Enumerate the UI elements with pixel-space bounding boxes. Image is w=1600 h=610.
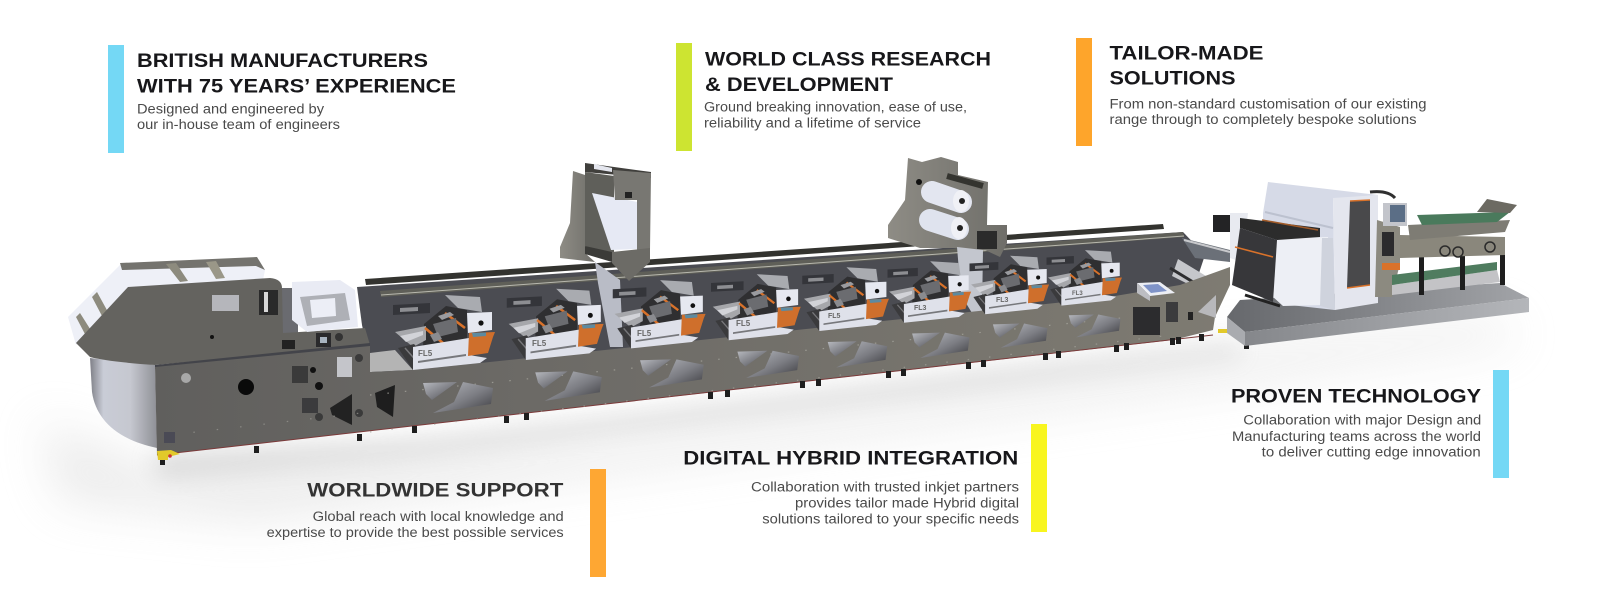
body text: to deliver cutting edge innovation	[1262, 445, 1481, 460]
heading: WORLD CLASS RESEARCH	[705, 48, 991, 70]
body text: From non-standard customisation of our existing	[1110, 96, 1426, 111]
rear rewinder and motor	[1213, 213, 1248, 262]
colour bar	[590, 469, 606, 577]
colour bar	[1493, 370, 1509, 478]
body text: Manufacturing teams across the world	[1232, 429, 1481, 444]
heading: DIGITAL HYBRID INTEGRATION	[683, 448, 1018, 470]
print station 7: FL3	[996, 297, 1009, 304]
panel: British manufacturers	[108, 45, 456, 153]
floor shadow	[40, 320, 1520, 520]
heading: & DEVELOPMENT	[705, 74, 893, 96]
heading: TAILOR-MADE	[1110, 42, 1264, 64]
colour bar	[676, 43, 692, 151]
heading	[1110, 42, 1264, 89]
printing press machine	[68, 157, 1529, 465]
panel: tailor-made solutions	[1076, 38, 1426, 146]
delivery column	[1375, 220, 1400, 297]
lower main frame	[155, 267, 1230, 455]
safety stops	[157, 329, 1230, 460]
back wall and rails	[357, 224, 1230, 372]
body text	[751, 479, 1019, 526]
body text: range through to completely bespoke solutions	[1110, 112, 1417, 127]
body text: reliability and a lifetime of service	[704, 115, 921, 130]
monitor on arm	[1370, 192, 1407, 226]
frame cut-outs and holes	[170, 290, 1180, 435]
colour bar	[108, 45, 124, 153]
main white cabinet	[1263, 182, 1378, 310]
body text	[1232, 412, 1481, 460]
print station 7	[970, 256, 1049, 348]
upper side frame	[76, 278, 370, 365]
body text: Designed and engineered by	[137, 101, 324, 116]
colour bar	[1031, 424, 1047, 532]
heading	[705, 48, 991, 96]
panel: worldwide support	[267, 469, 606, 577]
print station 5	[802, 267, 889, 368]
body text	[704, 100, 967, 130]
tower with twin rolls	[888, 157, 1007, 313]
finishing unit	[1213, 182, 1529, 346]
tower with web sheet	[560, 163, 651, 347]
lower conveyor	[1392, 250, 1505, 295]
print station 6: FL3	[914, 305, 927, 312]
body text	[1110, 96, 1426, 127]
heading: WORLDWIDE SUPPORT	[307, 480, 563, 502]
panel: research and development	[676, 43, 991, 151]
body text: Ground breaking innovation, ease of use,	[704, 100, 967, 115]
heading: WITH 75 YEARS’ EXPERIENCE	[137, 76, 456, 98]
colour bar	[1076, 38, 1092, 146]
print station 8	[1046, 250, 1122, 337]
panel: digital hybrid integration	[683, 424, 1047, 532]
panel: proven technology	[1231, 370, 1509, 478]
heading: SOLUTIONS	[1110, 67, 1236, 89]
platform base	[1227, 283, 1529, 346]
body text: Collaboration with major Design and	[1243, 412, 1481, 427]
heading	[137, 50, 456, 98]
machine feet	[160, 316, 1426, 465]
print station 2: FL5	[532, 339, 547, 348]
body text: expertise to provide the best possible services	[267, 525, 564, 540]
unwind roll shell	[90, 358, 157, 448]
outfeed control panel	[1133, 282, 1216, 335]
heading: PROVEN TECHNOLOGY	[1231, 385, 1481, 407]
body text: Global reach with local knowledge and	[313, 509, 564, 524]
body text: solutions tailored to your specific needs	[762, 511, 1019, 526]
print station 4: FL5	[736, 319, 751, 328]
heading: BRITISH MANUFACTURERS	[137, 50, 428, 72]
body text: Collaboration with trusted inkjet partners	[751, 479, 1019, 494]
body text	[137, 101, 340, 132]
upper conveyor	[1400, 199, 1517, 258]
body text: our in-house team of engineers	[137, 117, 340, 132]
gap behind coating unit	[280, 288, 298, 336]
print station 6	[888, 261, 971, 358]
print station 8: FL3	[1072, 291, 1083, 297]
die-cut black module	[1232, 218, 1320, 306]
print station 5: FL5	[828, 313, 841, 320]
print station 4	[711, 274, 801, 378]
print station 3: FL5	[637, 329, 652, 338]
print station 2	[507, 289, 604, 401]
print station 3	[613, 280, 706, 388]
print station 1: FL5	[418, 349, 433, 358]
body text	[267, 509, 564, 540]
print station 1	[393, 295, 495, 413]
body text: provides tailor made Hybrid digital	[795, 495, 1019, 510]
coating unit housing	[292, 280, 358, 332]
infeed web rollers	[68, 257, 265, 345]
